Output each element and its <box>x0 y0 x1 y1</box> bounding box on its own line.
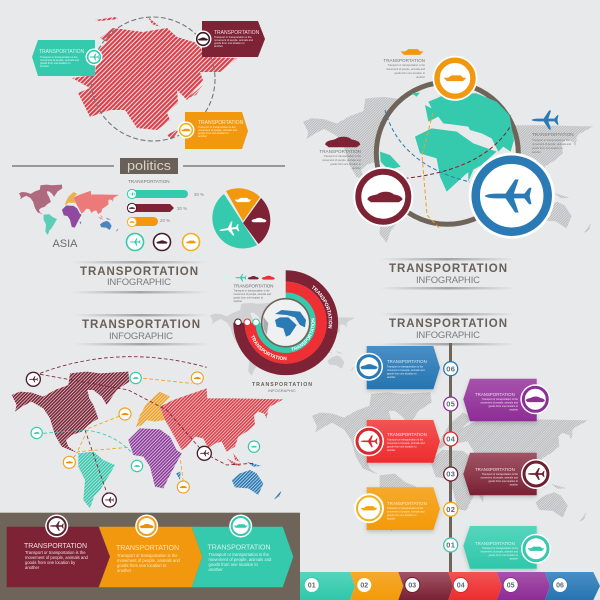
title: block A <box>72 261 207 294</box>
arrow: teal: Transport or transportation is the <box>208 552 270 557</box>
banner: 05 purple <box>463 379 550 421</box>
pie chart <box>212 188 270 248</box>
strip numbers: 03 <box>408 582 416 590</box>
arc labels: TRANSPORTATION <box>312 285 332 328</box>
small label: plane: movement of people, animals and <box>532 142 571 146</box>
banner: 06 blue: movement of people, animals and <box>387 369 425 372</box>
markers: orange <box>63 372 203 493</box>
callout: orange: movement of people, animals and <box>198 128 237 132</box>
panel: Asia map <box>32 17 265 149</box>
callout: teal: goods from one location to <box>40 61 71 65</box>
banner: 02 orange: Transport or transportation is the <box>387 507 424 510</box>
title: block D: TRANSPORTATION <box>389 318 507 330</box>
small label: plane: goods from one location to <box>532 146 563 150</box>
arrow: maroon: goods from one location by <box>25 560 76 565</box>
icon: ship circle <box>432 56 478 101</box>
title: block B: INFOGRAPHIC <box>109 331 173 342</box>
banner: 02 orange: another <box>387 518 396 520</box>
banner: 04 red: Transport or transportation is the <box>387 438 424 442</box>
strip numbers: 06 <box>556 582 564 590</box>
dashed routes <box>385 110 510 229</box>
end markers <box>235 319 259 326</box>
text block: movement of people, animals and <box>234 293 272 296</box>
banner: 05 purple: TRANSPORTATION <box>475 392 515 397</box>
arc: maroon <box>239 276 332 369</box>
arrow: orange: movement of people, animals and <box>117 558 181 563</box>
banner: 02 orange: movement of people, animals and <box>387 510 425 514</box>
banner: 01 teal: goods from one location to <box>489 554 519 557</box>
callout: maroon: TRANSPORTATION <box>214 30 260 36</box>
small label: ship: TRANSPORTATION <box>383 58 425 63</box>
banner: 01 teal: Transport or transportation is the <box>482 547 519 550</box>
arrow: maroon: Transport or transportation is the <box>25 550 86 555</box>
arrow: orange: another <box>117 568 132 573</box>
title: block D: INFOGRAPHIC <box>416 330 480 341</box>
bar chart <box>127 179 204 227</box>
banner: 05 purple: goods from one location to <box>489 405 519 408</box>
text block: goods from one location to <box>234 296 264 300</box>
arrow: maroon: movement of people, animals and <box>25 555 89 560</box>
banner: 06 blue: another <box>387 376 396 379</box>
callout: teal: another <box>40 64 49 68</box>
timeline number markers: 04 <box>446 435 456 444</box>
arrow: orange: goods from one location to <box>117 563 167 568</box>
banner: 04 red: movement of people, animals and <box>387 442 425 445</box>
dashed circle route <box>91 17 215 141</box>
callout: maroon <box>194 21 265 57</box>
arrow: teal: goods from one location to <box>208 562 259 567</box>
title: block A: TRANSPORTATION <box>80 266 198 278</box>
callout: maroon: Transport or transportation is the <box>214 35 252 39</box>
banner: 03 maroon: Transport or transportation is the <box>482 473 519 476</box>
banner: 03 maroon: movement of people, animals and <box>480 476 519 480</box>
small label: ship: another <box>416 75 425 79</box>
panel: brown arrows <box>0 513 300 600</box>
banner: 06 blue <box>355 346 440 389</box>
small label: plane: TRANSPORTATION <box>532 132 574 137</box>
map label: ASIA <box>52 238 78 250</box>
map: grey hatched world <box>303 97 593 243</box>
small label: plane: another <box>532 150 541 154</box>
title: block C <box>380 258 515 290</box>
banner: 06 blue: goods from one location to <box>387 372 417 376</box>
banner: 03 maroon: goods from one location to <box>489 480 519 483</box>
arrow: teal: another <box>208 567 223 572</box>
small title <box>252 382 312 393</box>
callout: teal: movement of people, animals and <box>40 58 79 62</box>
arrow: orange: Transport or transportation is the <box>117 553 178 558</box>
callout: maroon: goods from one location to <box>214 41 245 45</box>
markers: teal <box>31 372 260 472</box>
panel: coloured world map <box>19 185 119 250</box>
banner: 02 orange: TRANSPORTATION <box>387 501 427 506</box>
arrow: teal <box>192 527 293 587</box>
banner: 03 maroon: another <box>510 484 518 486</box>
arc: teal <box>259 296 312 349</box>
banner: 01 teal: TRANSPORTATION <box>475 541 515 546</box>
panel: circular chart <box>210 270 355 393</box>
panel: world routes map <box>12 357 283 508</box>
strip segments <box>300 572 600 600</box>
text block: Transport or transportation is the <box>234 290 270 292</box>
strip numbers: 02 <box>360 582 368 590</box>
bar chart: 20 % <box>160 218 170 223</box>
small label: ship: goods from one location to <box>394 71 426 75</box>
banner: 05 purple: Transport or transportation is the <box>482 398 519 401</box>
callout: orange: another <box>198 134 207 138</box>
timeline number markers: 01 <box>446 541 455 550</box>
panel: numbered bottom strip <box>300 572 600 600</box>
timeline number markers: 02 <box>446 505 455 514</box>
banner: 04 red: TRANSPORTATION <box>387 432 427 437</box>
title: block B: TRANSPORTATION <box>82 319 200 331</box>
small label: ship: Transport or transportation is the <box>387 63 426 67</box>
arrow: maroon: TRANSPORTATION <box>24 543 87 550</box>
banner: 03 maroon: TRANSPORTATION <box>475 467 515 472</box>
arrow: teal: movement of people, animals and <box>208 557 272 562</box>
map: grey hatched world <box>312 392 588 531</box>
panel: politics heading <box>12 158 285 174</box>
ring <box>376 82 518 224</box>
hatched continents <box>12 372 283 508</box>
banner: 04 red <box>354 420 440 463</box>
bar chart: 30 % <box>194 192 204 197</box>
panel: politics heading: politics <box>127 159 171 173</box>
globe <box>262 299 310 347</box>
small label: car: Transport or transportation is the <box>323 154 362 158</box>
icon: car circle <box>353 167 413 227</box>
banner: 05 purple: another <box>510 408 518 412</box>
bar chart: TRANSPORTATION <box>128 179 170 184</box>
map: Asia hatched <box>72 17 237 140</box>
banner: 01 teal <box>463 526 551 569</box>
arc: red <box>250 287 321 358</box>
callout: teal: TRANSPORTATION <box>39 49 85 55</box>
header icons <box>235 274 275 282</box>
strip numbers: 04 <box>457 582 465 590</box>
small label: plane <box>532 111 574 154</box>
callout: teal <box>32 40 102 76</box>
text block <box>234 283 274 303</box>
callout: teal: Transport or transportation is the <box>40 55 78 59</box>
title: block C: TRANSPORTATION <box>389 263 507 275</box>
small label: car: movement of people, animals and <box>322 158 362 162</box>
arc labels: TRANSPORTATION <box>290 318 315 351</box>
callout: maroon: movement of people, animals and <box>214 38 253 42</box>
bar chart: 30 % <box>177 206 187 211</box>
small label: plane: Transport or transportation is the <box>532 138 570 142</box>
text block: TRANSPORTATION <box>234 283 274 288</box>
small title: TRANSPORTATION <box>252 382 312 388</box>
banner: 02 orange <box>354 487 440 530</box>
callout: orange: Transport or transportation is the <box>198 125 236 129</box>
globe continents <box>380 93 514 192</box>
text block: another <box>234 300 242 303</box>
map: continents <box>19 185 119 235</box>
icon: plane circle <box>469 153 555 239</box>
arc labels <box>251 285 332 360</box>
small label: car: goods from one location to <box>330 162 362 166</box>
callout: orange <box>178 112 248 149</box>
banner: 06 blue: Transport or transportation is the <box>387 366 424 368</box>
timeline number markers <box>444 362 458 552</box>
callout: orange: TRANSPORTATION <box>198 120 244 126</box>
strip numbers <box>304 578 568 592</box>
arrow: teal: TRANSPORTATION <box>208 544 270 552</box>
arrow: orange <box>99 527 202 587</box>
legend icons <box>126 234 200 250</box>
small label: ship: movement of people, animals and <box>386 67 426 71</box>
title: block D <box>380 313 515 346</box>
map: grey world <box>210 303 355 376</box>
callout: maroon: another <box>214 44 223 48</box>
banner: 01 teal: movement of people, animals and <box>480 550 519 554</box>
small title: INFOGRAPHIC <box>268 388 296 393</box>
panel: globe routes <box>303 49 593 243</box>
banner: 03 maroon <box>463 453 551 495</box>
arrow: maroon <box>7 527 110 587</box>
banner: 02 orange: goods from one location to <box>387 514 417 517</box>
callout: orange: goods from one location to <box>198 131 229 135</box>
strip numbers: 01 <box>308 582 316 590</box>
panel: vertical timeline <box>312 343 588 573</box>
title: block C: INFOGRAPHIC <box>416 275 480 286</box>
small label: car: TRANSPORTATION <box>319 149 361 154</box>
timeline axis <box>449 343 452 573</box>
title: block A: INFOGRAPHIC <box>107 277 171 288</box>
small label: car: another <box>352 166 361 170</box>
small label: car <box>319 137 362 170</box>
small label: ship <box>383 49 426 79</box>
banner: 04 red: another <box>387 449 396 452</box>
timeline number markers: 06 <box>446 364 455 373</box>
title: block B <box>74 314 209 346</box>
arrow icons <box>45 514 252 538</box>
arrow: orange: TRANSPORTATION <box>116 545 179 552</box>
banner: 06 blue: TRANSPORTATION <box>387 359 427 364</box>
arrow: maroon: another <box>25 565 40 570</box>
dashed routes <box>40 357 253 500</box>
markers: planes <box>26 372 211 507</box>
timeline number markers: 05 <box>446 400 455 409</box>
banner: 04 red: goods from one location to <box>387 446 417 448</box>
banner: 05 purple: movement of people, animals and <box>480 402 519 404</box>
arc labels: TRANSPORTATION <box>251 334 286 360</box>
timeline number markers: 03 <box>446 470 455 479</box>
banner: 01 teal: another <box>510 558 518 560</box>
strip numbers: 05 <box>507 582 515 590</box>
